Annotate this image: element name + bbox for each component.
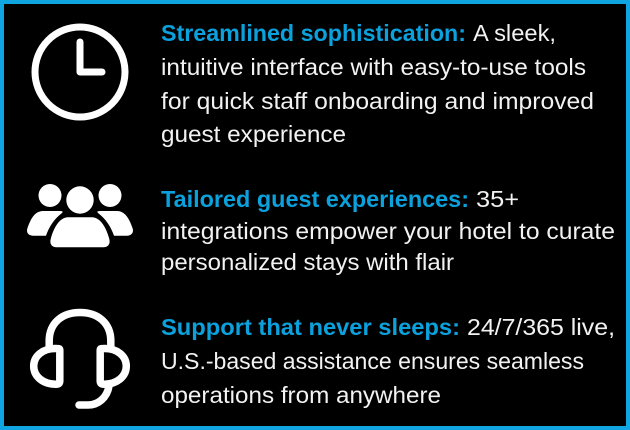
text block: streamlined sophistication: Streamlined sophistication: <box>161 20 466 46</box>
text block: tailored guest experiences: Tailored guest experiences: <box>161 186 469 212</box>
text block: support that never sleeps: operations from anywhere <box>161 382 441 408</box>
text block: streamlined sophistication: for quick staff onboarding and improved <box>161 88 594 114</box>
text block: support that never sleeps: U.S.-based assistance ensures seamless <box>161 348 584 374</box>
text block: streamlined sophistication <box>161 20 594 147</box>
icon: group of people <box>27 184 133 247</box>
text block: support that never sleeps: 24/7/365 live, <box>467 314 615 340</box>
text block: support that never sleeps <box>161 314 615 408</box>
text block: streamlined sophistication: guest experience <box>161 121 346 147</box>
text block: tailored guest experiences: personalized stays with flair <box>161 249 454 275</box>
icon: clock <box>35 27 125 117</box>
text block: support that never sleeps: Support that never sleeps: <box>161 314 460 340</box>
text block: tailored guest experiences <box>161 186 615 275</box>
text block: tailored guest experiences: 35+ <box>476 186 519 212</box>
text block: streamlined sophistication: intuitive interface with easy-to-use tools <box>161 54 586 80</box>
text block: tailored guest experiences: integrations empower your hotel to curate <box>161 218 615 244</box>
text block: streamlined sophistication: A sleek, <box>473 20 556 46</box>
icon: headset <box>34 312 126 405</box>
